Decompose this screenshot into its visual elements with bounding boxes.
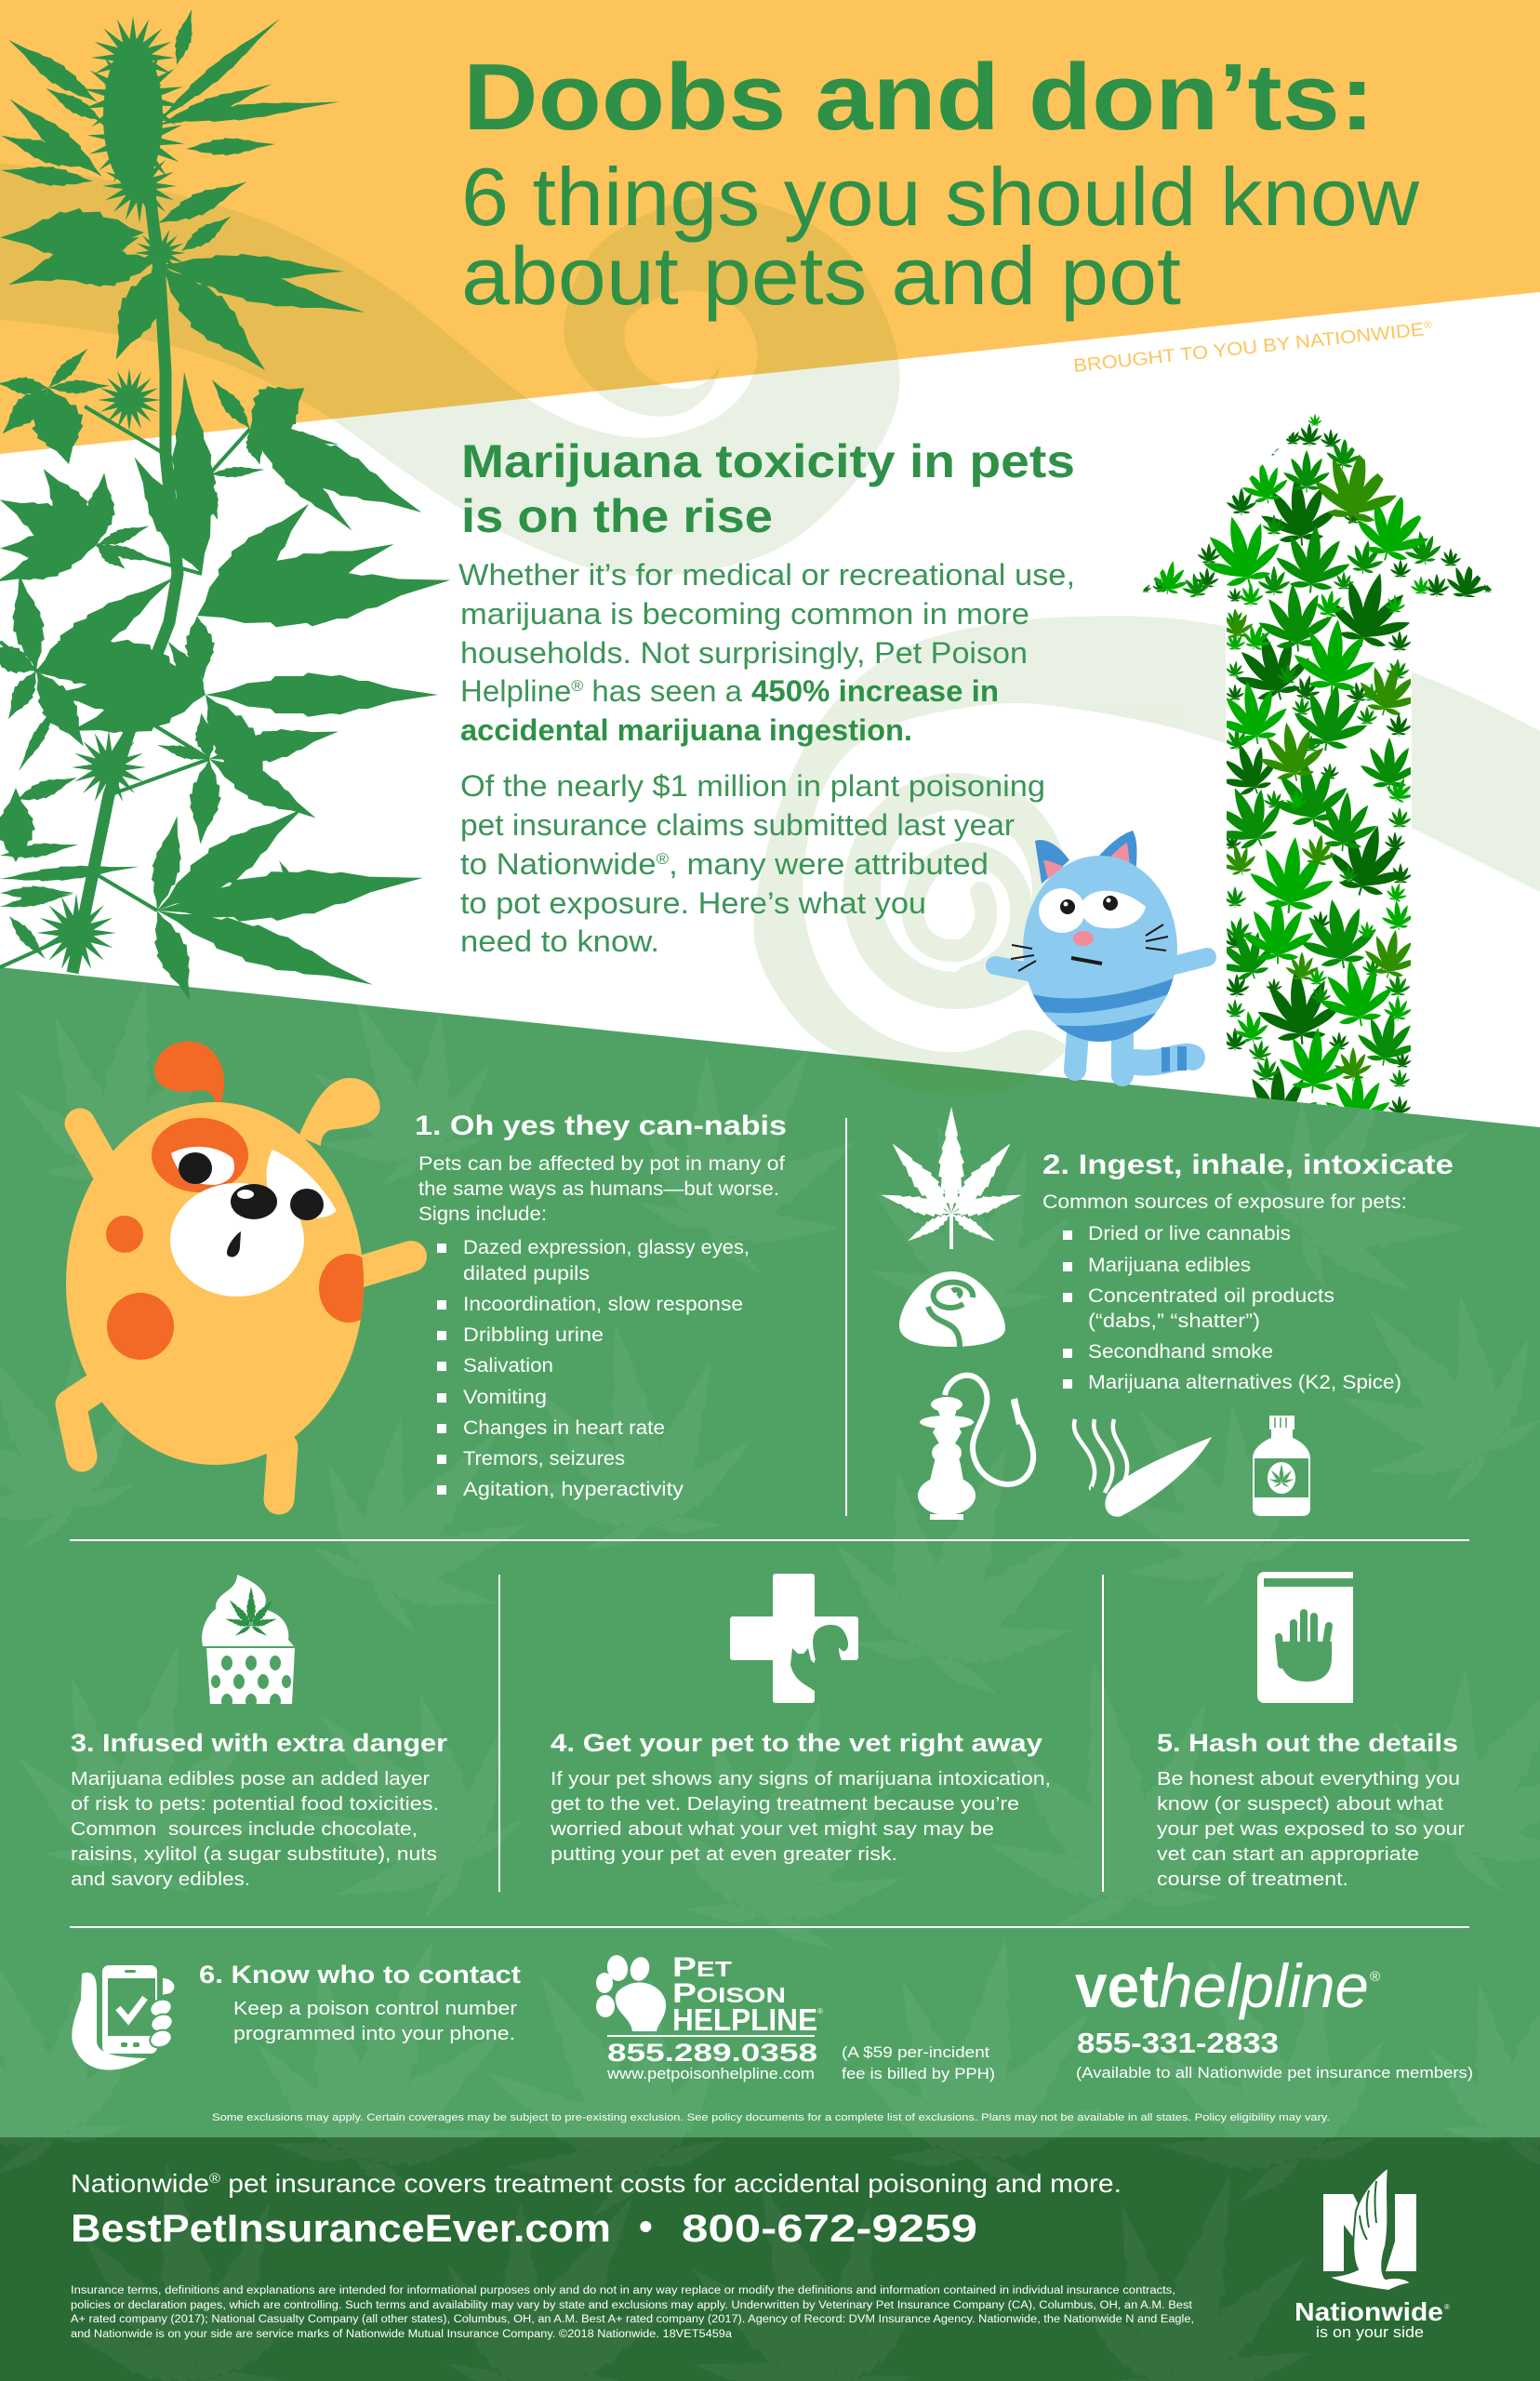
upper left leaf and bud: [0, 343, 161, 471]
dog illustration: [66, 1042, 411, 1499]
section 2: Ingest, inhale, intoxicate: 2. Ingest, inhale, intoxicate: [1042, 1150, 1454, 1180]
icon: hookah: [918, 1376, 1033, 1520]
exposure list: Concentrated oil products: [1088, 1285, 1334, 1307]
symptoms list: Tremors, seizures: [463, 1448, 625, 1470]
bottom large leaf: [37, 791, 426, 1006]
icon: book with stop hand: [1257, 1572, 1353, 1703]
exposure list: Marijuana alternatives (K2, Spice): [1088, 1372, 1401, 1393]
footer call to action: pet insurance covers treatment costs for accidental poisoning and more.: [220, 2169, 1122, 2198]
lower left sprigs: [0, 704, 139, 964]
section 3: Infused with extra danger: and savory edibles.: [71, 1869, 250, 1890]
icon: cannabis leaf: [879, 1107, 1024, 1249]
fee note: (A $59 per-incident: [842, 2043, 989, 2061]
section 5: Hash out the details: vet can start an appropriate: [1157, 1844, 1419, 1865]
horizontal divider one: [70, 1539, 1469, 1541]
exposure list: Secondhand smoke: [1088, 1341, 1273, 1363]
section 1: Oh yes they can-nabis: Pets can be affected by pot in many of: [418, 1153, 785, 1175]
Nationwide logo: [1294, 2167, 1450, 2341]
footer legal text: Insurance terms, definitions and explanations are intended for informational purposes only and do not in any way replace or modify the definitions and information contained in individual insurance contracts,: [71, 2285, 1175, 2296]
intro heading: [461, 435, 1075, 542]
Pet Poison Helpline logo: P ET: [672, 1952, 732, 1983]
symptoms list: [437, 1237, 750, 1500]
Pet Poison Helpline logo: ®: [817, 2007, 823, 2015]
exposure list: Marijuana edibles: [1088, 1255, 1251, 1276]
Nationwide logo: Nationwide: [1294, 2297, 1443, 2326]
symptoms list: Incoordination, slow response: [463, 1294, 743, 1315]
intro paragraph one: Whether it’s for medical or recreational use,: [458, 558, 1075, 592]
footer legal text: A+ rated company (2017); National Casualty Company (all other states), Columbus, OH, an A.M. Best A+ rated company (2017). Agency of Record: DVM Insurance Agency. Nationwide, the Nationwide N and Eagle,: [71, 2314, 1194, 2325]
symptoms list: dilated pupils: [463, 1263, 590, 1284]
footer legal text: policies or declaration pages, which are controlling. Such terms and availability may vary by state and exclusions may apply. Underwritten by Veterinary Pet Insurance Company (CA), Columbus, OH, an A.M. Best: [71, 2300, 1193, 2311]
intro paragraph one: accidental marijuana ingestion.: [460, 713, 912, 747]
vethelpline logo and number: 855-331-2833: [1077, 2027, 1279, 2059]
right large leaf two: [47, 614, 438, 809]
footer call to action: 800-672-9259: [682, 2206, 977, 2250]
section 6: Know who to contact: [199, 1961, 521, 2044]
cannabis plant silhouette: [0, 7, 454, 1006]
intro heading: is on the rise: [461, 490, 773, 542]
vethelpline logo and number: (Available to all Nationwide pet insurance members): [1076, 2064, 1473, 2082]
section 4: Get your pet to the vet right away: [550, 1729, 1051, 1865]
symptoms list: Agitation, hyperactivity: [463, 1479, 684, 1500]
intro paragraph one: [458, 558, 1075, 747]
section 4: Get your pet to the vet right away: If your pet shows any signs of marijuana intoxication,: [551, 1769, 1051, 1789]
vethelpline logo and number: helpline: [1159, 1951, 1369, 2020]
intro heading: Marijuana toxicity in pets: [461, 435, 1075, 487]
Nationwide logo: ®: [1444, 2303, 1450, 2311]
section 6: Know who to contact: Keep a poison control number: [233, 1999, 517, 2019]
section 5: Hash out the details: your pet was exposed to so your: [1157, 1819, 1465, 1840]
symptoms list: Changes in heart rate: [463, 1417, 665, 1439]
icon: cupcake: [202, 1575, 297, 1709]
footer legal text: and Nationwide is on your side are service marks of Nationwide Mutual Insurance Company. ©2018 Nationwide. 18VET5459a: [71, 2329, 733, 2340]
section 4: Get your pet to the vet right away: worried about what your vet might say may be: [550, 1819, 994, 1840]
section 3: Infused with extra danger: [71, 1729, 448, 1890]
exclusions fine print: Some exclusions may apply. Certain coverages may be subject to pre-existing exclusion. See policy documents for a complete list of exclusions. Plans may not be available in all states. Policy eligibility may vary.: [212, 2112, 1330, 2123]
background swirls: [0, 163, 1540, 1096]
Pet Poison Helpline logo: 855.289.0358: [607, 2039, 817, 2067]
background leaf pattern: [0, 2137, 1540, 2381]
top flower bud: [73, 16, 192, 223]
vertical divider: [845, 1118, 847, 1516]
section 2: Ingest, inhale, intoxicate: Common sources of exposure for pets:: [1042, 1191, 1407, 1213]
intro paragraph two: , many were attributed: [669, 847, 989, 881]
title: Doobs and don’ts:: [463, 46, 1374, 150]
lower hub leaf: [72, 712, 341, 845]
intro paragraph one: 450% increase in: [751, 674, 999, 708]
right large leaf one: [182, 489, 454, 682]
top leaves: [0, 7, 368, 386]
exposure list: Dried or live cannabis: [1088, 1223, 1291, 1244]
intro paragraph one: Helpline: [460, 674, 568, 708]
footer call to action: BestPetInsuranceEver.com: [71, 2206, 611, 2250]
symptoms list: Salivation: [463, 1355, 553, 1377]
background: white middle band: [0, 292, 1540, 1127]
exposure list: (“dabs,” “shatter”): [1088, 1310, 1260, 1332]
section 3: Infused with extra danger: 3. Infused with extra danger: [71, 1729, 448, 1757]
Pet Poison Helpline logo: [596, 1952, 823, 2082]
intro paragraph two: pet insurance claims submitted last year: [460, 808, 1015, 842]
section 3: Infused with extra danger: of risk to pets: potential food toxicities.: [71, 1794, 439, 1815]
fee note: fee is billed by PPH): [842, 2065, 995, 2082]
symptoms list: Dazed expression, glassy eyes,: [463, 1237, 750, 1258]
up arrow made of cannabis leaves: [1136, 409, 1499, 1136]
vertical divider: [1102, 1575, 1104, 1892]
intro paragraph one: ®: [571, 677, 584, 695]
icon: medical cross with pets: [730, 1574, 858, 1703]
fee note: [842, 2043, 995, 2082]
exposure list: [1063, 1223, 1401, 1393]
intro paragraph two: Of the nearly $1 million in plant poisoning: [460, 769, 1045, 803]
centre tall leaves: [119, 370, 224, 582]
section 3: Infused with extra danger: Marijuana edibles pose an added layer: [71, 1769, 430, 1789]
Pet Poison Helpline logo: P OISON: [672, 1978, 786, 2009]
middle left leaf: [0, 563, 185, 755]
section 4: Get your pet to the vet right away: 4. Get your pet to the vet right away: [551, 1729, 1042, 1757]
icon: hand holding phone: [72, 1965, 175, 2070]
title: about pets and pot: [461, 230, 1181, 322]
section 2: Ingest, inhale, intoxicate: [1042, 1150, 1454, 1393]
icon: chocolate: [899, 1271, 1005, 1347]
title: [461, 46, 1419, 322]
Pet Poison Helpline logo: HELPLINE: [672, 2002, 817, 2037]
title: 6 things you should know: [461, 151, 1419, 243]
section 1: Oh yes they can-nabis: 1. Oh yes they can-nabis: [415, 1111, 787, 1141]
intro paragraph one: households. Not surprisingly, Pet Poison: [460, 636, 1028, 670]
icon: paw: [596, 1953, 666, 2031]
section 4: Get your pet to the vet right away: putting your pet at even greater risk.: [551, 1844, 897, 1865]
intro paragraph two: need to know.: [460, 924, 659, 958]
section 5: Hash out the details: [1157, 1729, 1465, 1890]
left hub leaf: [0, 459, 159, 596]
intro paragraph two: [460, 769, 1045, 958]
intro paragraph two: to Nationwide: [460, 847, 641, 881]
footer call to action: ®: [209, 2171, 220, 2187]
section 3: Infused with extra danger: raisins, xylitol (a sugar substitute), nuts: [71, 1844, 437, 1865]
footer call to action: •: [639, 2204, 653, 2248]
icon: joint and smoke: [1074, 1419, 1212, 1517]
background: dark green footer: [0, 2137, 1540, 2381]
cat illustration: [995, 831, 1207, 1075]
icon: bottle: [1253, 1416, 1310, 1516]
Pet Poison Helpline logo: www.petpoisonhelpline.com: [606, 2065, 815, 2082]
section 5: Hash out the details: course of treatment.: [1157, 1869, 1348, 1890]
section 4: Get your pet to the vet right away: get to the vet. Delaying treatment because you’re: [551, 1794, 1019, 1815]
section 5: Hash out the details: know (or suspect) about what: [1157, 1794, 1444, 1815]
symptoms list: Dribbling urine: [463, 1324, 604, 1346]
intro paragraph two: to pot exposure. Here’s what you: [460, 886, 926, 920]
vethelpline logo and number: ®: [1370, 1969, 1380, 1985]
Nationwide logo: is on your side: [1316, 2323, 1424, 2341]
vethelpline logo and number: [1075, 1951, 1473, 2082]
section 1: Oh yes they can-nabis: the same ways as humans—but worse.: [418, 1178, 779, 1200]
footer call to action: [71, 2169, 1122, 2250]
section 5: Hash out the details: Be honest about everything you: [1157, 1769, 1460, 1789]
background: orange header: [0, 0, 1540, 465]
intro paragraph two: ®: [657, 850, 670, 868]
vethelpline logo and number: vet: [1075, 1951, 1159, 2020]
intro paragraph one: has seen a: [583, 674, 742, 708]
brought to you by: BROUGHT TO YOU BY NATIONWIDE: [1072, 323, 1393, 377]
section 6: Know who to contact: programmed into your phone.: [233, 2024, 515, 2044]
vertical divider: [498, 1575, 500, 1892]
upper right leaf: [193, 366, 431, 540]
background: green section: [0, 967, 1540, 2137]
brought to you by: ®: [1423, 320, 1432, 331]
footer call to action: Nationwide: [71, 2169, 200, 2198]
section 6: Know who to contact: 6. Know who to contact: [199, 1961, 521, 1989]
section 5: Hash out the details: 5. Hash out the details: [1157, 1729, 1458, 1757]
intro paragraph one: marijuana is becoming common in more: [460, 597, 1029, 631]
section 1: Oh yes they can-nabis: [415, 1111, 787, 1500]
footer legal text: [71, 2285, 1194, 2340]
horizontal divider two: [70, 1926, 1469, 1928]
section 1: Oh yes they can-nabis: Signs include:: [418, 1204, 547, 1225]
section 3: Infused with extra danger: Common sources include chocolate,: [71, 1819, 418, 1840]
plant stems: [73, 186, 178, 973]
symptoms list: Vomiting: [463, 1387, 547, 1408]
